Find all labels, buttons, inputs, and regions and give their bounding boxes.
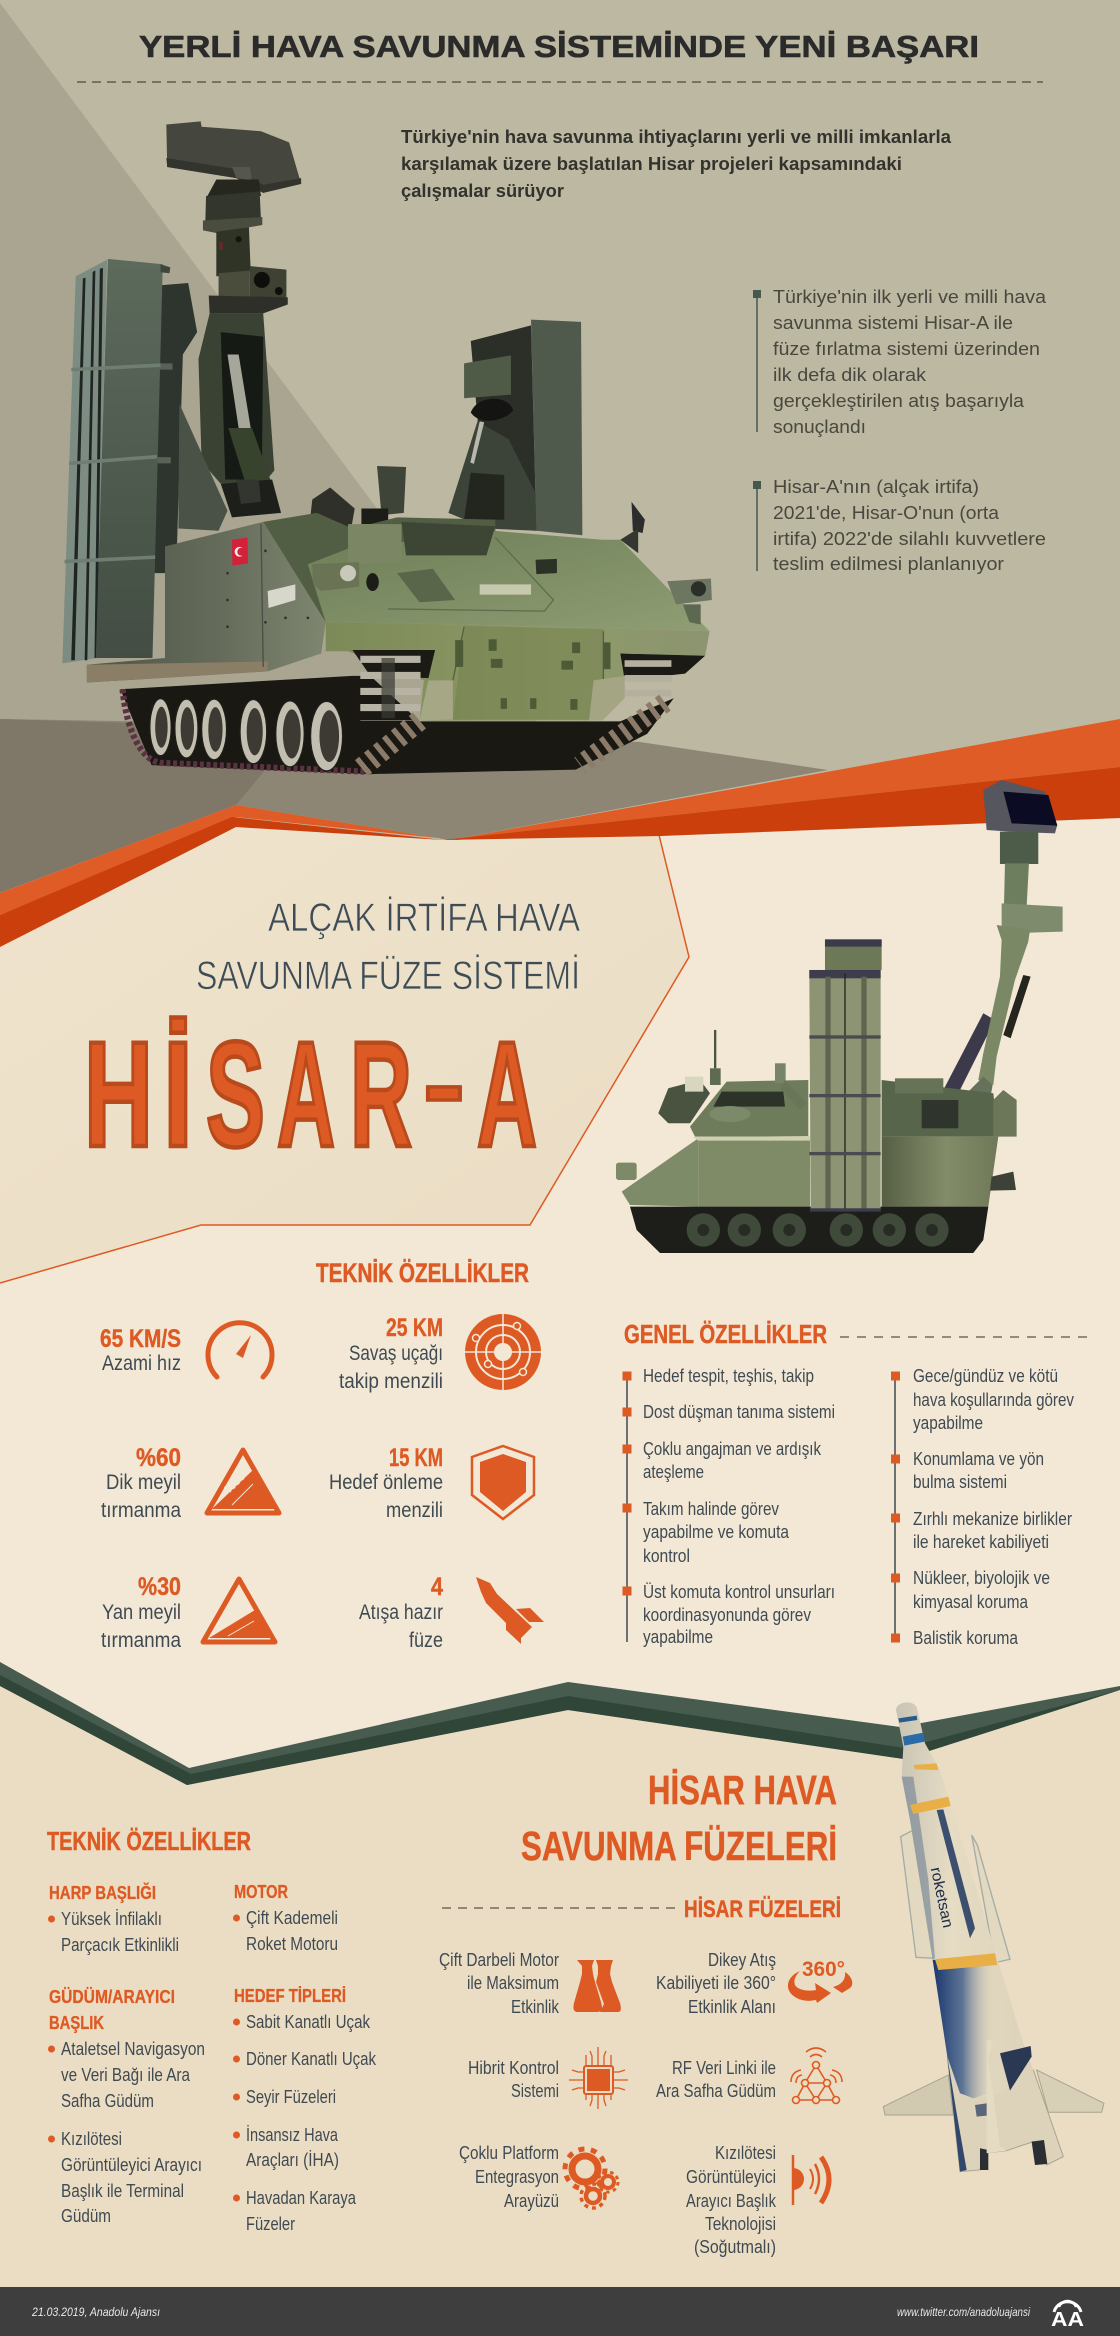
list: guidance seeker [48, 1987, 205, 2226]
list: general features left [622, 1366, 835, 1647]
feature: infrared seeker: Görüntüleyici [686, 2167, 776, 2187]
feature: RF data link: Ara Safha Güdüm [656, 2081, 776, 2101]
list: target types: İnsansız Hava [246, 2125, 339, 2145]
list: motor: Çift Kademeli [246, 1908, 338, 1928]
heading: Hisar air defense missiles: HİSAR HAVA [648, 1767, 837, 1813]
radar head [983, 780, 1057, 833]
list: guidance seeker: BAŞLIK [49, 2013, 104, 2033]
spec: interception range [329, 1444, 443, 1522]
hull side [87, 522, 326, 683]
bullet: first test firing [753, 287, 1047, 437]
panel: Hisar-A title area [0, 827, 689, 1283]
list: general features left: koordinasyonunda görev [643, 1605, 811, 1625]
feature: dual pulse motor: Çift Darbeli Motor [439, 1950, 559, 1970]
feature: infrared seeker [686, 2143, 777, 2257]
spec: top speed: Azami hız [102, 1352, 181, 1375]
heading: Hisar-A: İ [163, 1010, 193, 1178]
feature: RF data link [656, 2058, 776, 2101]
feature: dual pulse motor [439, 1950, 560, 2017]
tracks and road wheels [120, 656, 674, 774]
feature: vertical launch [656, 1950, 776, 2017]
list: general features left: yapabilme ve komuta [643, 1522, 790, 1542]
list: general features right: yapabilme [913, 1413, 983, 1433]
bullet: delivery plan: 2021'de, Hisar-O'nun (orta [773, 503, 1000, 523]
heading: Hisar-A: S [206, 1010, 265, 1178]
radar panel [166, 121, 301, 193]
feature: hybrid control [468, 2058, 559, 2101]
list: general features right: hava koşullarında görev [913, 1390, 1074, 1410]
list: general features left: Hedef tespit, teşhis, takip [643, 1366, 814, 1386]
hisar decal [268, 584, 295, 608]
heading: Hisar-A: A [477, 1010, 537, 1178]
list: target types: Araçları (İHA) [246, 2150, 339, 2170]
icon: gears [565, 2149, 618, 2208]
spec: ready missiles: Atışa hazır [359, 1601, 443, 1624]
top equipment [263, 466, 645, 622]
spec: ready missiles [359, 1573, 443, 1652]
feature: hybrid control: Hibrit Kontrol [468, 2058, 559, 2078]
feature: multi platform: Entegrasyon [475, 2167, 559, 2187]
photo: Hisar-A launcher vehicle [62, 121, 712, 774]
missile body [896, 1702, 1033, 2153]
heading: Hisar-A: H [84, 1010, 153, 1178]
bullet: delivery plan: irtifa) 2022'de silahlı kuvvetlere [773, 529, 1046, 549]
list: general features right [891, 1366, 1074, 1648]
section heading: technical features: TEKNİK ÖZELLİKLER [316, 1258, 529, 1288]
list: target types: Havadan Karaya [246, 2188, 357, 2208]
list: general features right: Balistik koruma [913, 1628, 1019, 1648]
list: target types: Seyir Füzeleri [246, 2087, 336, 2107]
heading: Hisar-A: A [277, 1010, 335, 1178]
feature: hybrid control: Sistemi [511, 2081, 559, 2101]
photo: Hisar-A side view render [616, 780, 1063, 1253]
logo: Anadolu Agency: AA [1051, 2309, 1084, 2331]
spec: side climb: tırmanma [101, 1629, 181, 1652]
spec: fighter tracking range: Savaş uçağı [349, 1342, 443, 1365]
dark green chevron band [0, 1662, 1120, 1785]
spec: fighter tracking range: takip menzili [339, 1370, 443, 1393]
icon: radar target [464, 1312, 542, 1391]
intro text: karşılamak üzere başlatılan Hisar projeleri kapsamındaki [401, 154, 902, 174]
feature: dual pulse motor: ile Maksimum [467, 1973, 559, 1993]
bullet: delivery plan [753, 477, 1046, 574]
icon: 30 percent slope triangle: %30 [218, 1604, 246, 1629]
list: target types [233, 1986, 377, 2234]
list: guidance seeker: ve Veri Bağı ile Ara [61, 2065, 191, 2085]
intro text: Türkiye'nin hava savunma ihtiyaçlarını yerli ve milli imkanlarla [401, 127, 952, 147]
left launcher [62, 259, 227, 663]
headlights [312, 562, 712, 625]
list: general features right: Nükleer, biyolojik ve [913, 1568, 1050, 1588]
radar mast [198, 179, 288, 517]
spec: interception range: menzili [386, 1499, 443, 1522]
bullet: first test firing: savunma sistemi Hisar-A ile [773, 313, 1013, 333]
spec: fighter tracking range [339, 1314, 443, 1393]
feature: vertical launch: Kabiliyeti ile 360° [656, 1973, 776, 1993]
icon: rocket [476, 1577, 544, 1644]
feature: infrared seeker: Arayıcı Başlık [686, 2191, 777, 2211]
list: warhead [48, 1882, 179, 1955]
spec: fighter tracking range: 25 KM [386, 1314, 443, 1342]
bullet: first test firing: gerçekleştirilen atış başarıyla [773, 391, 1025, 411]
title: YERLİ HAVA SAVUNMA SİSTEMİNDE YENİ BAŞARI [139, 29, 979, 64]
list: guidance seeker: Başlık ile Terminal [61, 2181, 184, 2201]
list: guidance seeker: GÜDÜM/ARAYICI [49, 1987, 175, 2007]
footer bar [0, 2287, 1120, 2336]
icon: 360 degree rotation: 360° [802, 1958, 845, 1981]
footer twitter link: www.twitter.com/anadoluajansi [897, 2305, 1030, 2319]
spec: interception range: Hedef önleme [329, 1471, 443, 1494]
tracks and wheels [630, 1207, 988, 1253]
spec: side climb [101, 1573, 181, 1652]
spec: side climb: %30 [138, 1573, 181, 1601]
feature: multi platform: Arayüzü [504, 2191, 559, 2211]
right launcher [448, 320, 582, 535]
bullet: first test firing: füze fırlatma sistemi üzerinden [773, 339, 1040, 359]
list: guidance seeker: Görüntüleyici Arayıcı [61, 2155, 202, 2175]
spec: steep climb: Dik meyil [106, 1471, 181, 1494]
rear fins [883, 2070, 1104, 2115]
spec: steep climb: tırmanma [101, 1499, 181, 1522]
feature: vertical launch: Dikey Atış [708, 1950, 776, 1970]
heading: low altitude air defense [196, 895, 580, 998]
icon: speedometer [208, 1323, 272, 1377]
list: warhead: Yüksek İnfilaklı [61, 1909, 162, 1929]
list: guidance seeker: Ataletsel Navigasyon [61, 2039, 205, 2059]
list: warhead: HARP BAŞLIĞI [49, 1882, 156, 1903]
list: general features right: Gece/gündüz ve kötü [913, 1366, 1058, 1386]
list: motor: MOTOR [234, 1882, 288, 1902]
background: lower section [0, 1686, 1120, 2290]
list: motor: Roket Motoru [246, 1934, 338, 1954]
feature: infrared seeker: Kızılötesi [715, 2143, 776, 2163]
spec: steep climb: %60 [136, 1444, 181, 1472]
heading: low altitude air defense: ALÇAK İRTİFA HAVA [268, 895, 580, 940]
mast and arm [942, 832, 1063, 1110]
icon: 60 percent slope triangle: %60 [221, 1469, 248, 1496]
list: general features right: ile hareket kabiliyeti [913, 1532, 1049, 1552]
missile tail [947, 2057, 1063, 2172]
spec: side climb: Yan meyil [102, 1601, 181, 1624]
list: guidance seeker: Güdüm [61, 2206, 111, 2226]
feature: vertical launch: Etkinlik Alanı [688, 1997, 776, 2017]
background: top khaki section [0, 0, 1120, 893]
bullet: delivery plan: Hisar-A'nın (alçak irtifa) [773, 477, 979, 497]
list: general features left: Üst komuta kontrol unsurları [643, 1582, 835, 1602]
list: guidance seeker: Safha Güdüm [61, 2091, 154, 2111]
list: general features left: Çoklu angajman ve ardışık [643, 1439, 822, 1459]
heading: Hisar air defense missiles [521, 1767, 837, 1869]
icon: 60 percent slope triangle [207, 1450, 279, 1513]
spec: steep climb [101, 1444, 181, 1522]
front armour [326, 622, 710, 720]
bullet: first test firing: ilk defa dik olarak [773, 365, 927, 385]
heading: Hisar air defense missiles: SAVUNMA FÜZELERİ [521, 1823, 837, 1869]
list: general features right: Zırhlı mekanize birlikler [913, 1509, 1072, 1529]
list: general features left: kontrol [643, 1546, 690, 1566]
section heading: general features: GENEL ÖZELLİKLER [624, 1319, 827, 1349]
section heading: missile technical features: TEKNİK ÖZELLİKLER [47, 1826, 251, 1856]
feature: RF data link: RF Veri Linki ile [672, 2058, 776, 2078]
spec: top speed: 65 KM/S [100, 1325, 181, 1353]
bullet: first test firing: sonuçlandı [773, 417, 866, 437]
list: general features left: Takım halinde görev [643, 1499, 779, 1519]
feature: multi platform: Çoklu Platform [459, 2143, 559, 2163]
heading: Hisar-A [84, 1010, 537, 1178]
feature: dual pulse motor: Etkinlik [511, 1997, 560, 2017]
list: general features right: bulma sistemi [913, 1472, 1007, 1492]
heading: Hisar-A: R [350, 1010, 412, 1178]
icon: radio network [791, 2048, 842, 2104]
feature: infrared seeker: (Soğutmalı) [694, 2237, 776, 2257]
list: general features left: ateşleme [643, 1462, 704, 1482]
list: motor [233, 1882, 338, 1954]
top deck [658, 1030, 1017, 1137]
launcher stack [809, 939, 882, 1212]
icon: 360 degree rotation [788, 1958, 852, 2003]
feature: multi platform [459, 2143, 559, 2211]
roketsan marking: roketsan [927, 1866, 956, 1929]
heading: Hisar-A: - [423, 1023, 465, 1146]
top deck [308, 522, 710, 631]
intro text: çalışmalar sürüyor [401, 181, 564, 201]
mid wings [901, 1829, 1010, 1963]
list: target types: Döner Kanatlı Uçak [246, 2049, 377, 2069]
photo: missile [883, 1702, 1104, 2172]
bullet: delivery plan: teslim edilmesi planlanıyor [773, 554, 1004, 574]
section heading: Hisar missiles: HİSAR FÜZELERİ [684, 1896, 841, 1923]
list: general features left: Dost düşman tanıma sistemi [643, 1402, 835, 1422]
list: general features left: yapabilme [643, 1627, 713, 1647]
logo: Anadolu Agency [1051, 2301, 1084, 2331]
icon: microchip [569, 2047, 628, 2109]
list: target types: Füzeler [246, 2214, 295, 2234]
list: general features right: kimyasal koruma [913, 1592, 1029, 1612]
icon: rocket nozzles [573, 1960, 621, 2012]
spec: ready missiles: 4 [431, 1573, 443, 1601]
spec: ready missiles: füze [409, 1629, 443, 1652]
footer date and source: 21.03.2019, Anadolu Ajansı [31, 2305, 160, 2319]
spec: top speed [100, 1325, 181, 1375]
list: general features right: Konumlama ve yön [913, 1449, 1044, 1469]
list: target types: HEDEF TİPLERİ [234, 1986, 346, 2006]
turkish flag decal [232, 537, 248, 566]
icon: shield [472, 1446, 534, 1519]
feature: infrared seeker: Teknolojisi [705, 2214, 776, 2234]
orange chevron band [0, 719, 1120, 947]
spec: interception range: 15 KM [389, 1444, 443, 1472]
bullet: first test firing: Türkiye'nin ilk yerli ve milli hava [773, 287, 1047, 307]
list: warhead: Parçacık Etkinlikli [61, 1935, 179, 1955]
hull [616, 1136, 1016, 1207]
icon: 30 percent slope triangle [203, 1579, 275, 1642]
background: cream middle section [0, 818, 1120, 1700]
list: guidance seeker: Kızılötesi [61, 2129, 122, 2149]
list: target types: Sabit Kanatlı Uçak [246, 2012, 371, 2032]
intro text [401, 127, 952, 201]
icon: seeker signal [793, 2155, 829, 2205]
heading: low altitude air defense: SAVUNMA FÜZE SİSTEMİ [196, 953, 580, 998]
